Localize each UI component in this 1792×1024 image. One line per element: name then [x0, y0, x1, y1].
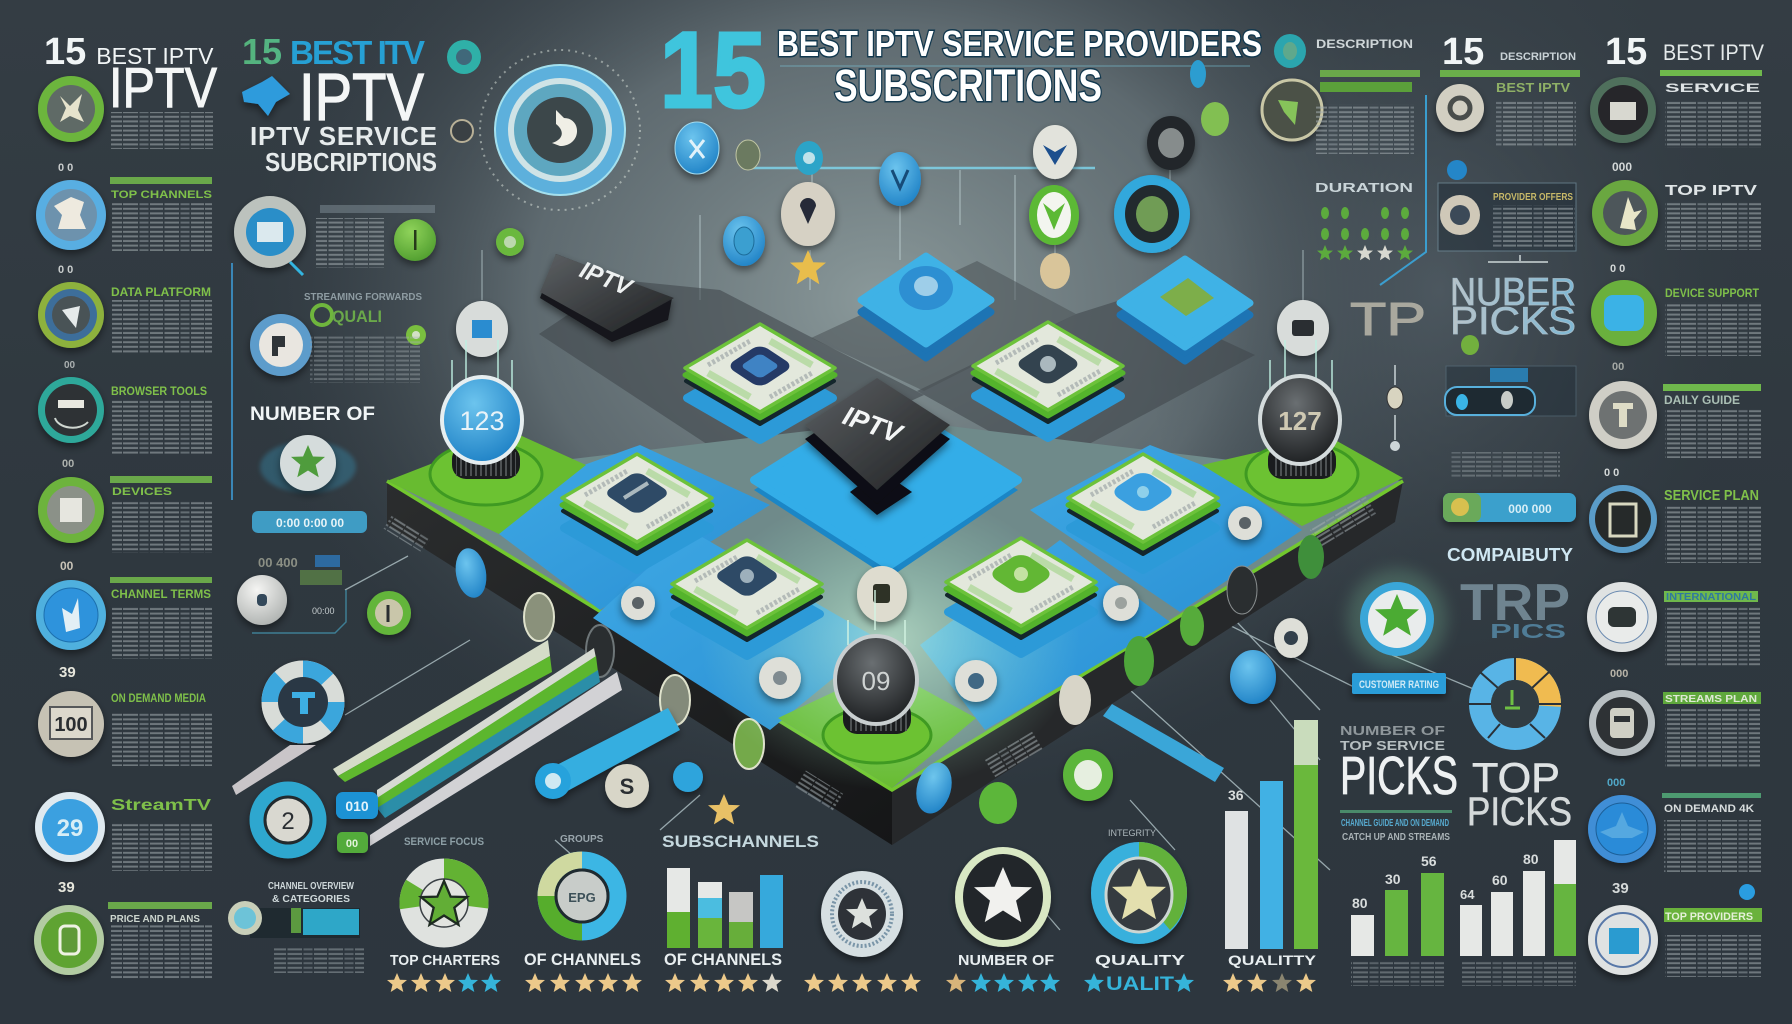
text 6: [1664, 591, 1760, 666]
icon: teal small: [447, 40, 481, 74]
platform green edges: [387, 481, 1403, 790]
text block 8: StreamTV: [111, 797, 211, 814]
labels and stars 7: [1223, 952, 1317, 992]
compatibility label: COMPAIBUTY: [1447, 545, 1573, 565]
icon: green dot: [1201, 102, 1229, 136]
small number labels: 39: [58, 879, 75, 896]
card: bottom left: & CATEGORIES: [272, 894, 350, 905]
text 2: TOP IPTV: [1665, 182, 1757, 199]
icon 9: [1588, 905, 1658, 975]
heading 15 description: DESCRIPTION: [1500, 51, 1576, 63]
icon row 3: [38, 282, 104, 348]
icon: white right: [1274, 618, 1308, 658]
small number labels: 00: [60, 559, 74, 573]
duration label: DURATION: [1315, 180, 1413, 195]
stripe 2: [377, 648, 600, 818]
stripe 3: [370, 672, 622, 846]
picks labels: PICKS: [1340, 746, 1458, 806]
title number 15: 15: [660, 9, 766, 130]
bar chart b: 64: [1460, 887, 1475, 902]
panel with tv stand: [1438, 183, 1576, 262]
chip right: [1068, 454, 1218, 570]
bar chart a: 30: [1385, 871, 1401, 887]
stripe left grey: [232, 745, 316, 795]
blue tile right lower: [920, 540, 1170, 730]
icon: blue right: [1230, 650, 1276, 704]
segmented ring 2: 2: [281, 808, 295, 835]
pin connector: [1387, 365, 1403, 451]
icon: green v: [1029, 185, 1079, 245]
tall bar chart: 36: [1228, 787, 1244, 803]
small number labels right: 0 0: [1610, 263, 1625, 275]
emblem circle 5: INTEGRITY: [1108, 828, 1156, 838]
chip back left: [685, 324, 835, 440]
text block 3: DATA PLATFORM: [111, 285, 211, 299]
heading: iptv service: IPTV SERVICE: [250, 121, 437, 151]
right column a: [1436, 31, 1580, 522]
bar chart b: 60: [1492, 872, 1508, 888]
side icon green 1: [1124, 636, 1154, 686]
picks labels: CATCH UP AND STREAMS: [1342, 832, 1450, 843]
text block: upper mid: [1316, 104, 1414, 154]
picks labels: TOP SERVICE: [1340, 738, 1445, 753]
gauge 1: star pie: [404, 836, 484, 941]
text 4: DAILY GUIDE: [1664, 393, 1740, 407]
puck right: 127: 127: [1278, 406, 1322, 436]
icon row 2: [36, 180, 106, 250]
side icon green 3: [1298, 535, 1324, 579]
icon: swirl: [1436, 84, 1484, 132]
text block 9: [108, 902, 212, 979]
bar chart a: [1351, 853, 1444, 986]
text 1: [1665, 81, 1761, 148]
labels and stars 6: UALIT: [1106, 974, 1174, 995]
puck left: 123: [430, 340, 542, 505]
stripe 1: [333, 640, 552, 782]
icon row 8: [35, 792, 105, 862]
icon: gold star small: [708, 794, 740, 824]
puck front: 09: 09: [862, 666, 890, 696]
green corner left: [387, 432, 586, 534]
small number labels right: 000: [1607, 777, 1625, 789]
text 3: [1665, 286, 1761, 356]
text 5: SERVICE PLAN: [1664, 487, 1759, 504]
bar chart a: 56: [1421, 853, 1437, 869]
icon: blue u: [723, 216, 765, 266]
service card 2: [250, 292, 426, 383]
text block 4: BROWSER TOOLS: [111, 384, 207, 398]
heading: 15 best itv: 15BEST ITV: [242, 31, 425, 72]
segmented ring 2: [257, 789, 319, 851]
icon: blue x: [675, 122, 719, 174]
panel with tv stand: PROVIDER OFFERS: [1493, 192, 1573, 203]
nuber picks: [1450, 271, 1576, 343]
icon: blue v: [879, 152, 921, 206]
iptv black box, back left: [540, 254, 674, 342]
icon: blue fish: [242, 76, 290, 116]
text block 4: [111, 384, 212, 454]
icon: green key: [367, 591, 411, 635]
text block 3: [111, 285, 212, 354]
side labels: [384, 497, 1376, 811]
blue tile left upper: [499, 445, 770, 610]
labels and stars 7: QUALITTY: [1228, 952, 1317, 968]
icon: teal top right: [1274, 34, 1306, 68]
side icon dark: [1227, 566, 1257, 614]
centre blue pad: [754, 398, 1018, 578]
small number labels right: [1604, 160, 1632, 897]
text block 7: ON DEMAND MEDIA: [111, 691, 206, 705]
icon: white top right: [1262, 80, 1322, 140]
green blue pill: 000 000: [1508, 502, 1552, 516]
blue pill: [252, 511, 367, 533]
green blue pill: [1443, 493, 1576, 522]
heading: iptv: IPTV: [299, 60, 424, 135]
small number labels: 00: [62, 458, 74, 470]
text 8: ON DEMAND 4K: [1664, 803, 1754, 815]
platform sides: [387, 481, 892, 845]
connector lines: [232, 95, 1500, 930]
service card 3: [237, 555, 346, 633]
floating icons: [447, 34, 1329, 357]
icon: concentric ring: [1114, 175, 1190, 253]
side icon white: [1059, 675, 1091, 725]
small number labels: 0 0: [58, 162, 73, 174]
card: bottom left: [228, 881, 364, 973]
back translucent panels: [539, 261, 1255, 473]
tile coins: [621, 506, 1262, 702]
text 1: SERVICE: [1665, 81, 1760, 95]
small number labels: [58, 162, 76, 896]
text block: BEST IPTV: [1496, 80, 1570, 95]
platform base: [384, 420, 1403, 845]
icon: white speech: [781, 182, 835, 246]
small green icon: [1461, 335, 1479, 355]
small dome icon: [1447, 160, 1467, 180]
icon: white shield: [1033, 125, 1077, 179]
labels and stars 1: [387, 952, 501, 992]
card: bottom left: CHANNEL OVERVIEW: [268, 881, 354, 892]
emblem circle 4: [955, 847, 1051, 947]
left column: [34, 31, 217, 979]
bottom row gauges: [387, 720, 1318, 995]
icon: star badge: [260, 435, 356, 493]
main title: [660, 9, 1262, 130]
text block 9: PRICE AND PLANS: [110, 914, 200, 925]
service card 2: QUALI: [332, 307, 382, 326]
heading 15 description: [1440, 31, 1580, 77]
right column b: [1587, 31, 1764, 977]
back blue chip: [861, 256, 991, 358]
icon 1: [1590, 77, 1656, 143]
heading: subscriptions: SUBCRIPTIONS: [265, 147, 437, 177]
icon row 5: [38, 477, 104, 543]
icon: gold star: [790, 250, 826, 284]
text block 8: [111, 797, 212, 871]
small number labels right: 0 0: [1604, 467, 1619, 479]
icon: green dot bottom: [979, 782, 1017, 824]
service card 3: 00 400: [258, 555, 298, 570]
icon: teal target: [795, 141, 823, 175]
labels and stars 3: [664, 950, 782, 992]
blue tile left lower: [593, 530, 880, 730]
labels and stars 1: TOP CHARTERS: [390, 952, 500, 969]
icon: dark small: [451, 120, 473, 142]
left heading: 15 best iptv: 15 BEST IPTV: [44, 31, 214, 73]
picks labels: NUMBER OF: [1340, 723, 1445, 738]
labels and stars 5: [946, 952, 1060, 992]
nuber picks: NUBER: [1450, 271, 1576, 314]
left heading: iptv: IPTV: [109, 56, 217, 120]
small number labels right: 000: [1612, 160, 1632, 174]
icon: coin right: [1277, 300, 1329, 356]
bar chart b: 80: [1523, 851, 1539, 867]
back blue chip with green centre: [1120, 259, 1250, 361]
text 6: INTERNATIONAL: [1666, 592, 1756, 603]
icon 6: [1587, 582, 1657, 652]
icon: coin left: [456, 301, 508, 357]
icon 2: [1592, 180, 1658, 246]
garbled note: [1450, 452, 1560, 478]
small number labels: 00: [64, 360, 76, 371]
text block: [1496, 80, 1576, 147]
labels and stars 2: OF CHANNELS: [524, 950, 641, 969]
green corner front: [778, 668, 976, 788]
labels and stars 6: QUALITY: [1095, 952, 1185, 969]
segmented ring 1: [270, 669, 336, 735]
picks labels: CHANNEL GUIDE AND ON DEMAND: [1341, 818, 1449, 829]
title line 1: BEST IPTV SERVICE PROVIDERS: [777, 23, 1262, 64]
blue label pill: CUSTOMER RATING: [1359, 679, 1439, 691]
channels bar chart: SUBSCHANNELS: [662, 832, 819, 851]
icon row 7: 100: [54, 714, 88, 736]
small number labels: 39: [59, 664, 76, 681]
labels and stars 6: [1084, 952, 1194, 995]
chip left: [562, 454, 712, 570]
gauge 1: star pie: SERVICE FOCUS: [404, 836, 484, 848]
bar chart a: 80: [1352, 895, 1368, 911]
blue slanted bar: [1103, 704, 1224, 782]
bar chart b: [1460, 840, 1576, 986]
heading 15 description: 15: [1442, 31, 1484, 73]
emblem circle 3: [821, 871, 903, 957]
text block 1: [111, 112, 213, 149]
gauge 2: donut: GROUPS: [560, 834, 604, 845]
star badge right: [1347, 569, 1447, 669]
icon: green olive: [736, 140, 760, 170]
icon: amber drop: [1040, 253, 1070, 289]
text 7: STREAMS PLAN: [1665, 694, 1757, 705]
text 8: [1662, 793, 1761, 872]
top picks graffiti: PICS: [1490, 621, 1566, 643]
tp letters: TP: [1350, 293, 1426, 345]
picks labels: [1340, 723, 1572, 843]
side icon 3: [660, 675, 690, 725]
gauge 2: donut: EPG: [568, 890, 596, 905]
iptv black box, back left: IPTV: [576, 257, 637, 302]
service card 3: 00:00: [312, 606, 335, 616]
channels bar chart: [662, 832, 819, 948]
top picks graffiti: TRP: [1460, 574, 1570, 632]
blue label pill: [1352, 673, 1446, 694]
blue pill: 0:00 0:00 00: [276, 516, 344, 530]
text 9: [1664, 884, 1762, 977]
side icon 4: [734, 719, 764, 769]
puck front: 09: [823, 590, 931, 763]
text 7: [1663, 692, 1761, 768]
chart pill green: [337, 832, 368, 853]
icon 8: [1588, 795, 1656, 863]
icon row 7: [38, 691, 104, 757]
description header: [1316, 37, 1420, 92]
title rule: [780, 65, 1250, 67]
text block 7: [111, 691, 212, 766]
text block 5: [110, 476, 212, 553]
chart pill blue: 010: [345, 798, 369, 814]
side icon green 2: [1180, 606, 1204, 646]
central glow: [700, 490, 1080, 790]
donut gauge: [1468, 657, 1562, 739]
small number labels right: 39: [1612, 880, 1629, 897]
picks labels: TOP: [1472, 754, 1560, 801]
icon: dark emblem: [1147, 116, 1195, 170]
side icon 2: [524, 593, 554, 641]
side icon blue 1: [452, 546, 490, 600]
gauge 2: donut: [546, 834, 618, 932]
icon: green small circle: [1063, 749, 1113, 801]
icon row 8: 29: [57, 815, 83, 842]
labels and stars 2: [524, 950, 642, 992]
text block 6: CHANNEL TERMS: [111, 587, 211, 601]
large target emblem: [480, 50, 640, 210]
text 5: [1664, 487, 1761, 563]
description header: DESCRIPTION: [1316, 37, 1413, 51]
text block 2: TOP CHANNELS: [111, 189, 212, 201]
chip front right: [946, 538, 1096, 654]
icon row 6: [36, 580, 106, 650]
icon 4: [1589, 381, 1657, 449]
service card 1: [234, 196, 436, 275]
green corner right: [1202, 436, 1403, 526]
blue tile right upper: [1030, 445, 1302, 612]
side pill: [586, 625, 614, 677]
icon row 1: [38, 76, 104, 142]
chart pill green: 00: [346, 838, 358, 850]
icon 3: [1591, 280, 1657, 346]
labels and stars 3: OF CHANNELS: [664, 950, 782, 969]
icon 5: [1589, 485, 1657, 553]
side icon blue front: [911, 758, 957, 818]
icon: green small: [496, 228, 524, 256]
rating leaves: [1317, 207, 1413, 260]
small number labels: 0 0: [58, 264, 73, 276]
chip front left: [672, 540, 822, 656]
puck left: 123: 123: [459, 406, 505, 436]
icon blue small: [673, 762, 703, 792]
text block 6: [110, 577, 212, 659]
text 4: [1663, 384, 1761, 458]
diagonal stripes: [232, 640, 622, 846]
text 3: DEVICE SUPPORT: [1665, 286, 1760, 300]
right inner column: [1315, 37, 1576, 986]
icon: mini blue drop: [1190, 60, 1206, 88]
heading 15 best iptv: BEST IPTV: [1663, 40, 1764, 65]
small number labels right: 000: [1610, 668, 1628, 680]
coin s: S: [620, 774, 634, 799]
dark control panel: [1445, 366, 1576, 416]
icon row 9: [34, 905, 104, 975]
chart pill blue: [336, 792, 378, 819]
number of label: NUMBER OF: [250, 404, 375, 425]
iptv central chip: [805, 378, 950, 515]
icon row 4: [38, 377, 104, 443]
labels and stars 5: NUMBER OF: [958, 952, 1054, 969]
coin s: [605, 764, 649, 808]
text block 2: [110, 177, 212, 251]
iptv central chip: IPTV: [839, 400, 907, 450]
blue pill left: [535, 708, 680, 799]
text block 5: DEVICES: [112, 486, 172, 498]
nuber picks: PICKS: [1450, 300, 1576, 343]
second column: [228, 31, 437, 973]
coin front centre: [857, 566, 907, 622]
title line 2: SUBSCRITIONS: [834, 60, 1102, 111]
emblem circle 5: [1091, 828, 1187, 944]
heading 15 best iptv: [1605, 31, 1764, 76]
tall bar chart: [1225, 720, 1318, 949]
service card 2: STREAMING FORWARDS: [304, 292, 422, 303]
text 2: [1665, 182, 1761, 250]
platform top: [387, 420, 1403, 790]
text 9: TOP PROVIDERS: [1665, 911, 1753, 923]
heading 15 best iptv: 15: [1605, 31, 1647, 73]
puck right: 127: [1246, 340, 1358, 505]
small number labels right: 00: [1612, 361, 1624, 373]
icon 7: [1589, 690, 1655, 756]
picks labels: PICKS: [1467, 790, 1572, 834]
stars 4: [804, 973, 921, 992]
chip back right: [973, 322, 1123, 438]
